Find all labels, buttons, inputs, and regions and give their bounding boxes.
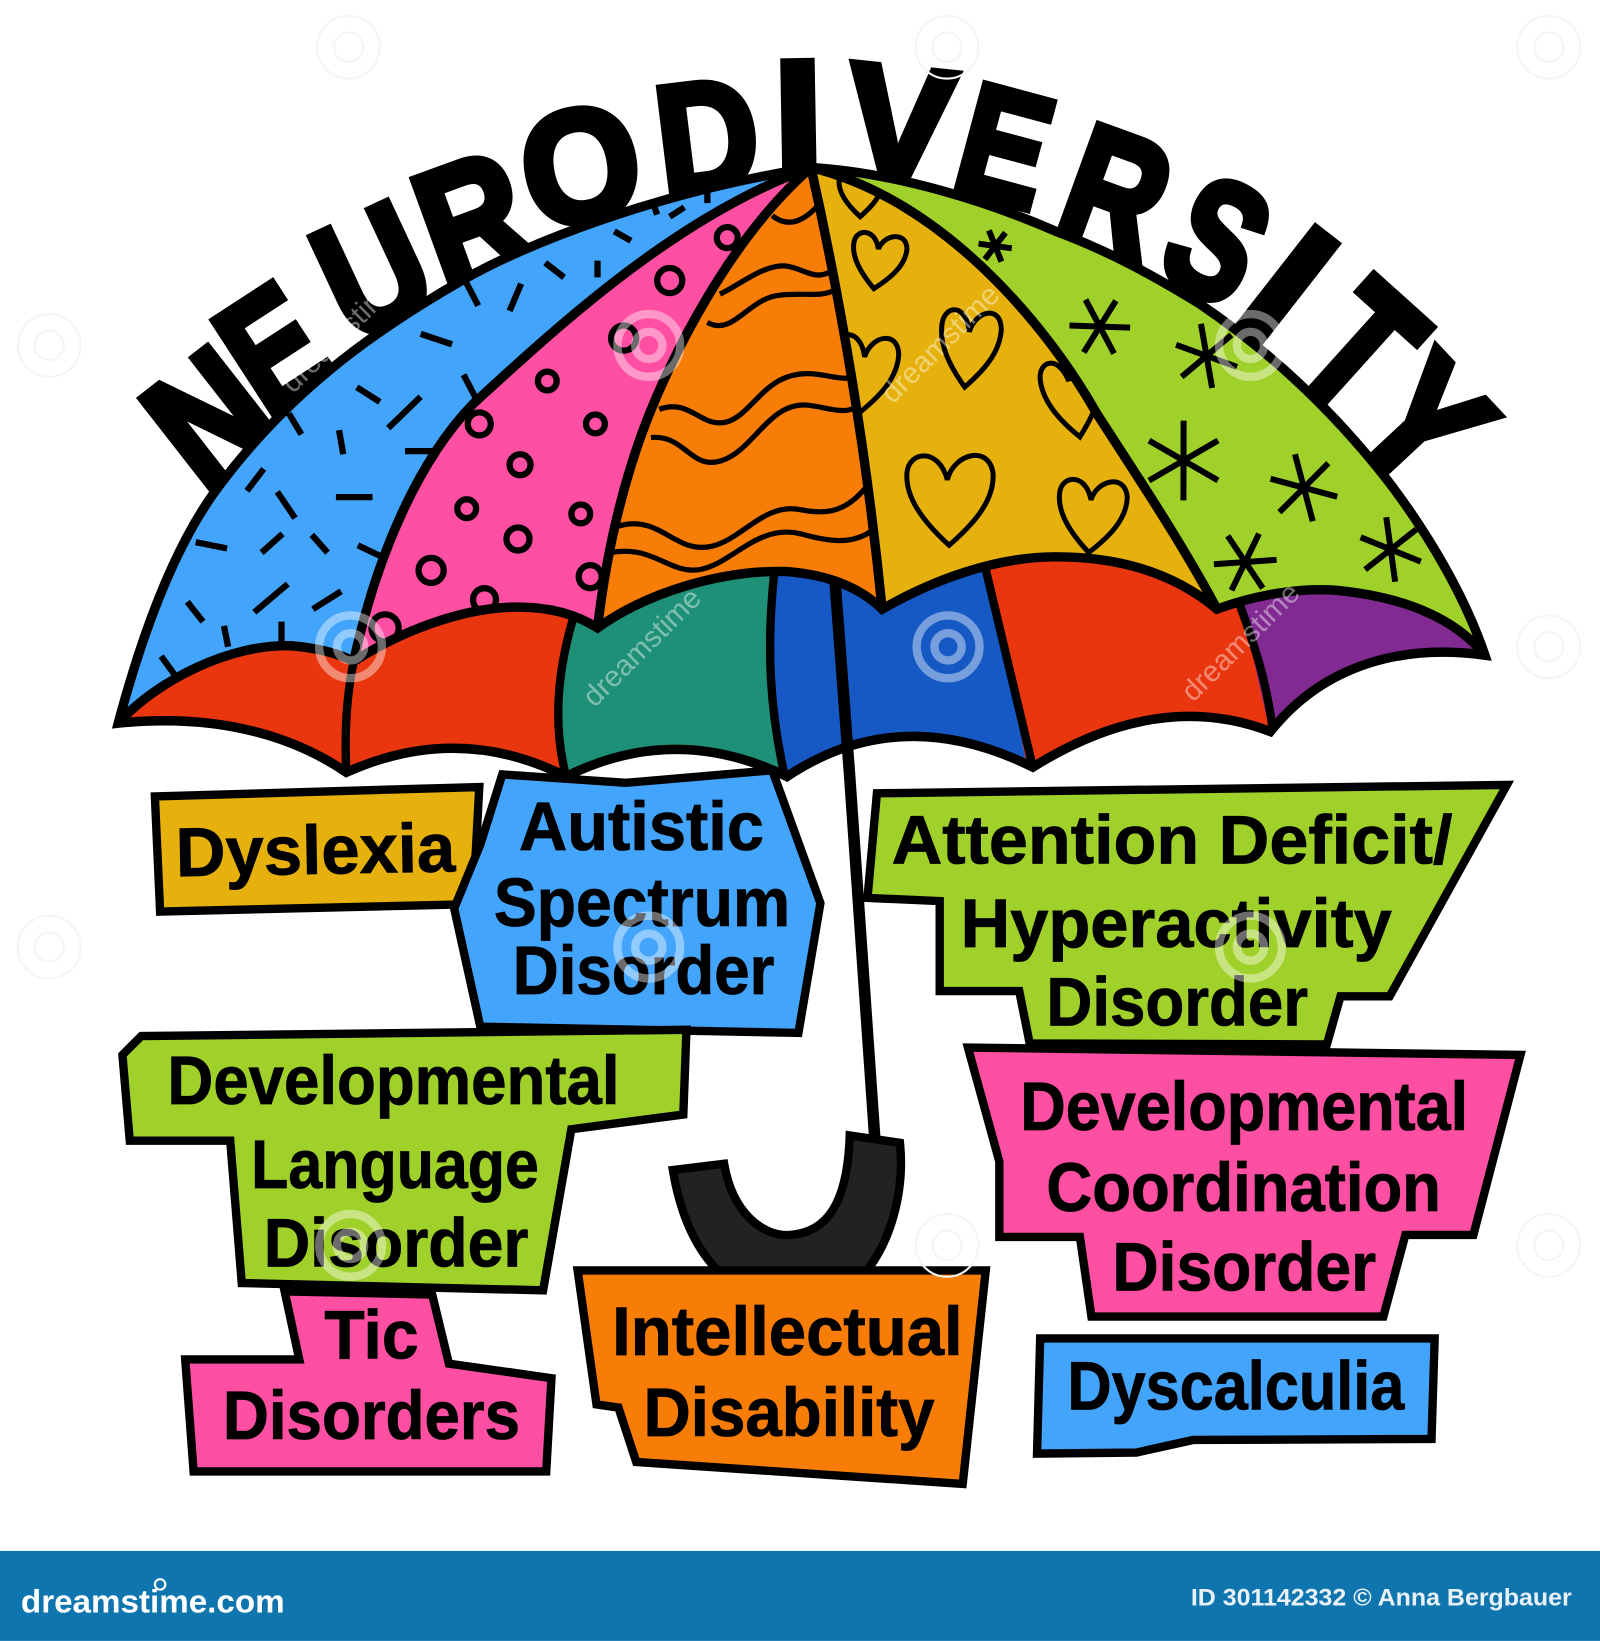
label: Intellectual Disability	[578, 1270, 986, 1484]
title: NEURODIVERSITY: S	[1136, 139, 1298, 343]
label: Developmental Coordination Disorder: Coordination	[1046, 1148, 1441, 1226]
title: NEURODIVERSITY: N	[112, 313, 308, 523]
label: Autistic Spectrum Disorder: Autistic	[519, 787, 764, 865]
title: NEURODIVERSITY: R	[392, 114, 553, 325]
label: Developmental Language Disorder: Developmental	[167, 1041, 619, 1119]
footer banner	[0, 1551, 1600, 1641]
title: NEURODIVERSITY: R	[1037, 87, 1194, 301]
watermarks: dreamstime	[1175, 576, 1306, 708]
footer brand: dreamstime.com	[21, 1584, 285, 1620]
panel: pink with circles	[360, 180, 790, 652]
label: Developmental Coordination Disorder: Developmental	[1020, 1067, 1468, 1145]
label: Developmental Coordination Disorder: Disorder	[1112, 1227, 1376, 1305]
label: Tic Disorders	[185, 1291, 551, 1471]
valance: coloured band	[130, 562, 1473, 772]
label: Developmental Coordination Disorder	[968, 1048, 1520, 1317]
label: Autistic Spectrum Disorder: Disorder	[513, 931, 774, 1009]
watermarks	[18, 16, 1580, 1277]
panel: blue with dashes	[128, 180, 770, 708]
label: Developmental Language Disorder: Language	[251, 1125, 539, 1203]
title: NEURODIVERSITY: E	[940, 48, 1070, 243]
title: NEURODIVERSITY: Y	[1318, 321, 1528, 525]
label: Attention Deficit / Hyperactivity Disorder: Hyperactivity	[961, 884, 1392, 962]
label: Dyslexia	[155, 787, 479, 912]
label: Developmental Language Disorder: Disorder	[264, 1203, 528, 1281]
label: Dyscalculia: Dyscalculia	[1067, 1347, 1405, 1425]
footer credit: ID 301142332 © Anna Bergbauer	[1191, 1584, 1572, 1611]
title: NEURODIVERSITY: I	[1196, 187, 1371, 393]
label: Autistic Spectrum Disorder	[454, 770, 820, 1033]
label: Attention Deficit / Hyperactivity Disorder: Attention Deficit/	[892, 800, 1452, 878]
label: Dyscalculia	[1037, 1338, 1435, 1454]
label: Attention Deficit / Hyperactivity Disorder	[867, 785, 1507, 1044]
title: NEURODIVERSITY: O	[507, 68, 654, 264]
umbrella handle	[673, 1135, 901, 1275]
footer logo spiral	[155, 1579, 165, 1590]
umbrella canopy	[105, 157, 1507, 795]
title: NEURODIVERSITY: T	[1256, 244, 1460, 458]
title: NEURODIVERSITY	[112, 29, 1528, 525]
watermarks: dreamstime	[576, 582, 708, 713]
title: NEURODIVERSITY: I	[773, 29, 824, 206]
label: Autistic Spectrum Disorder: Spectrum	[494, 863, 790, 941]
umbrella shaft	[835, 582, 875, 1139]
panel: orange with waves	[603, 176, 876, 618]
label: Tic Disorders: Disorders	[223, 1376, 520, 1454]
label: Intellectual Disability: Disability	[644, 1373, 935, 1451]
watermarks: dreamstime	[875, 278, 1006, 410]
label: Tic Disorders: Tic	[324, 1295, 419, 1373]
title: NEURODIVERSITY: D	[646, 43, 768, 232]
label: Dyslexia: Dyslexia	[175, 808, 456, 891]
label: Developmental Language Disorder	[122, 1030, 686, 1290]
label: Intellectual Disability: Intellectual	[612, 1292, 963, 1370]
title: NEURODIVERSITY: E	[186, 248, 361, 452]
panel: yellow with hearts	[817, 174, 1202, 602]
title: NEURODIVERSITY: V	[838, 29, 962, 217]
panel: green with asterisks	[854, 176, 1473, 636]
label: Attention Deficit / Hyperactivity Disorder: Disorder	[1046, 963, 1308, 1041]
title: NEURODIVERSITY: U	[288, 166, 459, 378]
canopy outline and ribs	[118, 168, 1485, 777]
watermarks: dreamstime	[275, 268, 406, 399]
